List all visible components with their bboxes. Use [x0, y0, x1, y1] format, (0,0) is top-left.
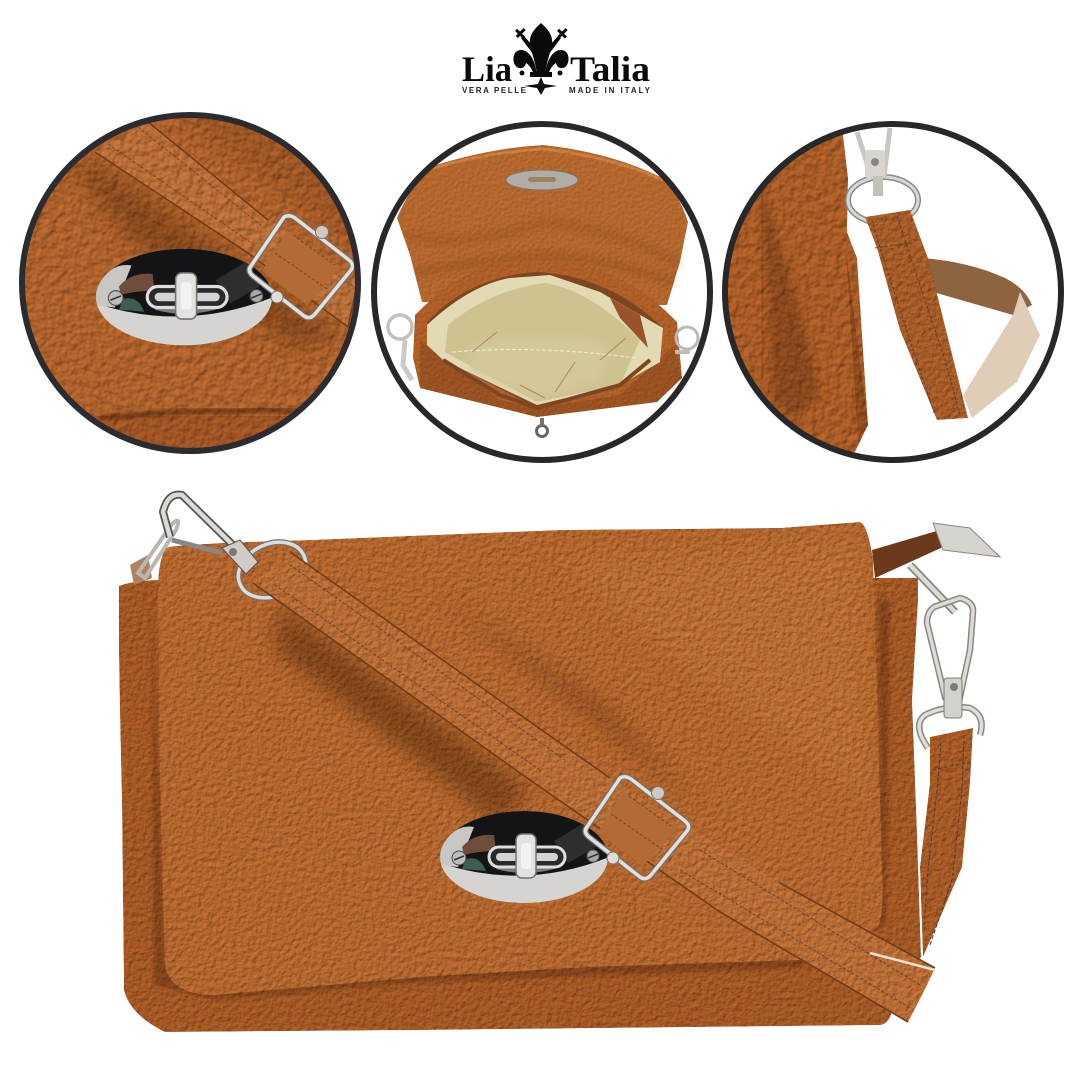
- brand name left: Lia: [462, 49, 512, 89]
- right clasp: [675, 350, 690, 354]
- left small ring: [138, 521, 178, 578]
- turn lock plate: [434, 807, 614, 903]
- buckle: [249, 216, 353, 318]
- panel: circle detail, turn lock: [15, 100, 365, 466]
- circle ring: [22, 115, 358, 451]
- right ring: [676, 327, 698, 349]
- lining: [427, 275, 663, 405]
- pocket leather: [610, 298, 648, 348]
- strap stitching: [275, 565, 920, 1008]
- strap stitching: [108, 127, 358, 290]
- zipper end tab: [933, 523, 1000, 557]
- right lower ring: [919, 707, 982, 748]
- right snap hook: [927, 598, 973, 697]
- metallic strap lining: [963, 292, 1040, 418]
- main product photo: tan leather bag: [119, 495, 1000, 1032]
- tagline right: MADE IN ITALY: [569, 86, 651, 95]
- right ring: [910, 565, 955, 612]
- flap: [158, 522, 883, 995]
- brand name right: Talia: [570, 49, 650, 89]
- bottom clasp: [536, 426, 548, 436]
- left clasp: [403, 340, 412, 380]
- panel: circle detail, interior: [374, 124, 710, 460]
- left leather tab: [130, 555, 152, 585]
- buckle: [585, 777, 689, 879]
- bag body: [413, 258, 682, 417]
- flap highlight: [560, 540, 870, 800]
- ring: [848, 177, 918, 223]
- icon: fleur-de-lis: [513, 23, 569, 95]
- bag side: [728, 135, 868, 452]
- circle ring: [374, 124, 710, 460]
- strap shadows: [275, 605, 530, 825]
- strap end edge: [870, 953, 935, 970]
- metal plate: [506, 170, 578, 190]
- zipper tape: [872, 530, 943, 578]
- lining print: [472, 332, 626, 398]
- leather surface: [25, 118, 355, 448]
- logo: Lia Talia: [462, 23, 651, 95]
- tagline left: VERA PELLE: [462, 86, 527, 95]
- circle ring: [725, 124, 1061, 460]
- strap ring: [229, 532, 315, 608]
- back of strap: [923, 258, 1032, 315]
- right swivel: [944, 678, 962, 718]
- front strap: [865, 210, 968, 420]
- leather body: [119, 522, 921, 1032]
- panel: circle detail, strap and hardware: [720, 124, 1061, 470]
- strap: [253, 552, 935, 1022]
- right strap drop: [920, 728, 973, 957]
- zipper edge: [427, 272, 663, 408]
- strap: [95, 122, 358, 327]
- strap edges: [95, 122, 358, 327]
- strap edges: [253, 552, 935, 1022]
- left snap hook: [163, 495, 258, 574]
- flap shadow on body: [152, 590, 890, 1000]
- snap hook: [857, 128, 890, 176]
- lining seam: [452, 350, 636, 358]
- stitching: [872, 216, 960, 415]
- open flap: [397, 145, 688, 305]
- right strap stitching: [924, 735, 970, 945]
- left ring: [388, 315, 412, 339]
- turn lock plate: [96, 248, 272, 346]
